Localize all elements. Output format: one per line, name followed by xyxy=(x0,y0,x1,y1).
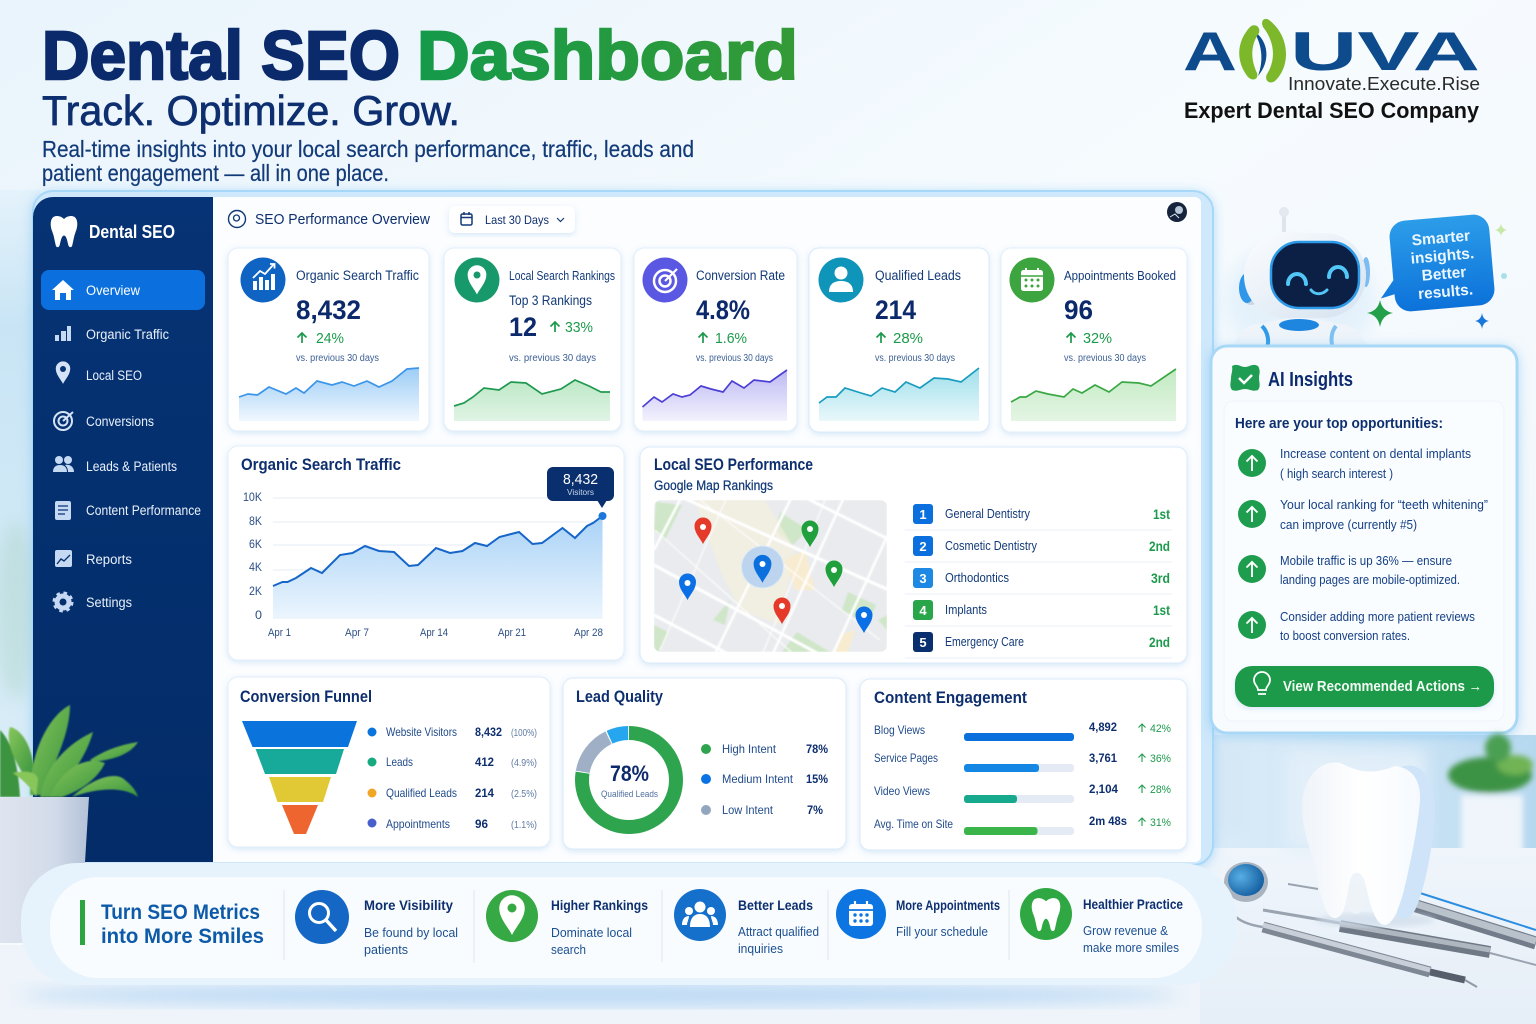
benefit: Better Leads: Attract qualified xyxy=(738,924,819,939)
KPI card: Conversion Rate: vs. previous 30 days xyxy=(696,353,773,364)
x axis labels: Apr 28 xyxy=(574,627,603,639)
sidebar brand: Dental SEO xyxy=(89,222,175,242)
speech bubble: results. xyxy=(1417,281,1474,303)
nav item: Leads & Patients: Leads & Patients xyxy=(86,459,177,474)
pin: red 1 xyxy=(694,518,712,544)
ranking: Orthodontics xyxy=(913,568,1170,588)
ranking: Implants xyxy=(913,600,1170,620)
icon xyxy=(818,258,864,302)
nav item: Leads & Patients xyxy=(53,456,177,474)
intro text xyxy=(42,136,694,186)
legend row: Qualified Leads: (2.5%) xyxy=(511,789,537,800)
legend row: High Intent: High Intent xyxy=(722,742,777,756)
bottom banner xyxy=(20,863,1237,1007)
benefit: More Visibility: patients xyxy=(364,942,408,957)
insight 3: landing pages are mobile-optimized. xyxy=(1280,572,1460,587)
legend row: Low Intent: 7% xyxy=(807,803,823,817)
sparkline xyxy=(454,380,610,421)
benefit: More Visibility: Be found by local xyxy=(364,925,458,940)
pin: blue 2 xyxy=(856,606,872,633)
sparkline xyxy=(1011,369,1176,421)
area line chart xyxy=(273,512,606,618)
icon: green check shield xyxy=(1230,365,1260,391)
intro text: patient engagement — all in one place. xyxy=(42,160,389,186)
nav item: Reports xyxy=(55,550,132,567)
intro text: Real-time insights into your local search performance, traffic, leads and xyxy=(42,136,694,162)
ranking: General Dentistry: 1st xyxy=(1153,506,1170,522)
x axis labels: Apr 1 xyxy=(268,627,291,639)
benefit: More Appointments: More Appointments xyxy=(896,897,1000,913)
y axis labels: 2K xyxy=(249,584,262,598)
KPI card: Organic Search Traffic xyxy=(228,248,429,431)
legend row: Leads: Leads xyxy=(386,755,413,769)
callout: 8,432 visitors: 8,432 xyxy=(563,471,598,488)
pin: green 2 xyxy=(826,560,842,587)
robot head xyxy=(1244,233,1366,318)
panel: Conversion Funnel xyxy=(228,677,550,847)
robot face xyxy=(1288,267,1347,294)
row: Video Views xyxy=(874,782,1171,803)
benefit: Better Leads: Better Leads xyxy=(738,897,813,913)
KPI card: Appointments Booked: 32% xyxy=(1083,330,1112,347)
icon xyxy=(240,258,286,302)
callout: 8,432 visitors: Visitors xyxy=(567,487,594,497)
legend row: Leads xyxy=(368,755,537,769)
legend row: Medium Intent: Medium Intent xyxy=(722,772,794,786)
row: Blog Views: Blog Views xyxy=(874,723,925,737)
plant left xyxy=(0,705,138,797)
legend row: Low Intent xyxy=(701,803,823,817)
y axis labels: 6K xyxy=(249,537,262,551)
panel: Content Engagement: Content Engagement xyxy=(874,689,1027,707)
y axis labels: 0 xyxy=(255,608,262,622)
KPI card: Conversion Rate xyxy=(634,248,797,431)
nav item: Overview xyxy=(41,270,205,310)
KPI card: Conversion Rate: Conversion Rate xyxy=(696,268,785,283)
benefit: Better Leads xyxy=(674,889,819,956)
nav item: Conversions: Conversions xyxy=(86,414,154,429)
back instrument xyxy=(1288,884,1536,943)
panel: Local SEO Performance: Local SEO Performance xyxy=(654,456,813,474)
pin: red 2 xyxy=(774,598,790,624)
KPI card: Local Search Rankings: vs. previous 30 days xyxy=(509,353,596,364)
KPI card: Appointments Booked: vs. previous 30 days xyxy=(1064,353,1146,364)
row: Service Pages: Service Pages xyxy=(874,751,938,765)
insight 1 xyxy=(1238,446,1471,481)
KPI card: Local Search Rankings: Top 3 Rankings xyxy=(509,293,592,308)
legend row: Appointments: Appointments xyxy=(386,817,450,831)
tooth back root xyxy=(1395,766,1435,919)
banner headline: Turn SEO Metrics xyxy=(101,901,260,924)
row: Blog Views: 4,892 xyxy=(1089,720,1117,734)
KPI card: Qualified Leads: 28% xyxy=(893,330,923,347)
date selector: Last 30 Days xyxy=(485,213,549,227)
ranking: Emergency Care: 5 xyxy=(919,635,927,650)
title: Dashboard xyxy=(417,17,798,94)
ranking: Cosmetic Dentistry: 2 xyxy=(919,539,927,554)
insight 2 xyxy=(1238,497,1488,532)
logo: ANUVA: A xyxy=(1183,20,1237,82)
KPI card: Organic Search Traffic: 8,432 xyxy=(296,295,361,325)
nav item: Settings: Settings xyxy=(86,595,132,610)
speech bubble xyxy=(1374,213,1496,314)
panel: Local SEO Performance xyxy=(640,447,1187,663)
probe xyxy=(1263,910,1536,965)
KPI card: Local Search Rankings: 33% xyxy=(565,319,593,336)
legend row: Medium Intent xyxy=(701,772,828,786)
sparkline xyxy=(642,370,787,421)
header: SEO Performance Overview: SEO Performance Overview xyxy=(255,211,430,228)
panel: Lead Quality xyxy=(563,678,846,849)
ranking: Cosmetic Dentistry xyxy=(913,536,1170,556)
button: View Recommended Actions xyxy=(1235,666,1494,707)
benefit: Better Leads: inquiries xyxy=(738,941,783,956)
benefit: Healthier Practice: Grow revenue & xyxy=(1083,923,1168,938)
panel: Local SEO Performance: Google Map Rankings xyxy=(654,478,773,493)
nav item: Organic Traffic xyxy=(55,326,169,342)
legend row: Low Intent: Low Intent xyxy=(722,803,774,817)
legend row: Qualified Leads: 214 xyxy=(475,786,494,800)
legend row: Appointments xyxy=(368,817,537,831)
legend row: Qualified Leads: Qualified Leads xyxy=(386,786,457,800)
benefit: Healthier Practice xyxy=(1020,888,1183,955)
y axis labels: 4K xyxy=(249,560,262,574)
mirror xyxy=(1224,862,1477,987)
legend row: Medium Intent: 15% xyxy=(806,772,828,786)
ranking: Emergency Care: 2nd xyxy=(1149,634,1170,650)
KPI card: Appointments Booked: Appointments Booked xyxy=(1064,268,1176,283)
ranking: Emergency Care: Emergency Care xyxy=(945,635,1024,649)
speech bubble: insights. xyxy=(1410,245,1475,268)
title xyxy=(42,17,798,94)
legend row: Website Visitors: 8,432 xyxy=(475,725,502,739)
insight 2: can improve (currently #5) xyxy=(1280,517,1417,532)
benefit: More Appointments xyxy=(836,889,1000,939)
benefit: More Visibility: More Visibility xyxy=(364,897,453,913)
sidebar xyxy=(33,197,213,862)
row: Avg. Time on Site: 31% xyxy=(1150,817,1171,829)
nav item: Local SEO xyxy=(56,361,142,384)
legend row: Website Visitors xyxy=(368,725,537,739)
benefit: Higher Rankings: Higher Rankings xyxy=(551,897,648,913)
x axis labels: Apr 14 xyxy=(420,627,448,639)
KPI card: Local Search Rankings: 12 xyxy=(509,312,537,342)
row: Video Views: 2,104 xyxy=(1089,782,1118,796)
nav item: Settings xyxy=(54,593,132,611)
panel: Content Engagement xyxy=(860,679,1187,850)
icon xyxy=(454,258,500,302)
KPI card: Conversion Rate: 1.6% xyxy=(715,330,747,347)
panel: AI Insights: AI Insights xyxy=(1268,369,1353,391)
row: Service Pages xyxy=(874,751,1171,772)
ranking: Implants: Implants xyxy=(945,603,987,617)
KPI card: Qualified Leads: Qualified Leads xyxy=(875,268,961,283)
insight 1: Increase content on dental implants xyxy=(1280,446,1471,461)
donut chart: Qualified Leads xyxy=(601,789,658,800)
KPI card: Conversion Rate: 4.8% xyxy=(696,295,750,325)
panel: Organic Search Traffic chart: Organic Search Traffic xyxy=(241,455,401,474)
KPI card: Local Search Rankings: Local Search Rankings xyxy=(509,269,615,283)
funnel chart xyxy=(242,721,357,834)
legend row: High Intent: 78% xyxy=(806,742,828,756)
title: Dental SEO xyxy=(42,17,400,94)
tagline: Track. Optimize. Grow. xyxy=(42,87,460,134)
ranking: Emergency Care xyxy=(913,632,1170,652)
button: View Recommended Actions: View Recommended Actions → xyxy=(1283,678,1482,695)
benefit: Higher Rankings xyxy=(486,890,648,957)
row: Service Pages: 3,761 xyxy=(1089,751,1117,765)
ranking: Cosmetic Dentistry: 2nd xyxy=(1149,538,1170,554)
ranking: Orthodontics: Orthodontics xyxy=(945,571,1009,585)
insight 3: Mobile traffic is up 36% — ensure xyxy=(1280,553,1452,568)
icon xyxy=(1010,258,1054,302)
panel: Organic Search Traffic chart xyxy=(228,446,624,660)
y axis labels xyxy=(243,490,262,622)
nav item: Overview: Overview xyxy=(86,283,140,298)
tooth model xyxy=(1302,762,1435,927)
pin: center xyxy=(742,546,784,588)
benefit: More Appointments: Fill your schedule xyxy=(896,924,988,939)
y axis labels: 10K xyxy=(243,490,262,504)
tooth front xyxy=(1302,762,1420,925)
plant pot xyxy=(0,797,89,943)
KPI card: Organic Search Traffic: 24% xyxy=(316,330,344,347)
ranking: Orthodontics: 3 xyxy=(919,571,927,586)
ranking: General Dentistry: 1 xyxy=(919,507,927,522)
legend row: High Intent xyxy=(701,742,828,756)
logo: ANUVA: Expert Dental SEO Company xyxy=(1184,98,1480,123)
ranking: General Dentistry: General Dentistry xyxy=(945,507,1031,521)
KPI card: Qualified Leads: 214 xyxy=(875,295,916,325)
insight 4: Consider adding more patient reviews xyxy=(1280,609,1475,624)
insight 2: Your local ranking for “teeth whitening” xyxy=(1280,497,1488,512)
sparkles xyxy=(1367,224,1507,329)
logo: ANUVA: UVA xyxy=(1290,20,1480,82)
logo: ANUVA xyxy=(1183,19,1480,123)
benefit: More Visibility xyxy=(295,890,458,957)
nav item: Local SEO: Local SEO xyxy=(86,368,142,383)
plant right, blurred xyxy=(1448,734,1533,855)
nav item: Conversions xyxy=(54,412,154,430)
KPI card: Organic Search Traffic: Organic Search Traffic xyxy=(296,268,419,283)
x axis labels xyxy=(268,627,603,639)
legend row: Leads: (4.9%) xyxy=(511,758,537,769)
panel: AI Insights: Here are your top opportunities: xyxy=(1235,415,1443,432)
benefit: Healthier Practice: make more smiles xyxy=(1083,940,1179,955)
benefit: Higher Rankings: Dominate local xyxy=(551,925,632,940)
donut chart: 78% xyxy=(610,761,649,786)
dashboard frame xyxy=(33,191,1213,865)
sparkline xyxy=(239,368,419,421)
legend row: Leads: 412 xyxy=(475,755,494,769)
map xyxy=(654,500,887,652)
nav item: Organic Traffic: Organic Traffic xyxy=(86,327,169,342)
banner headline: into More Smiles xyxy=(101,925,264,948)
ranking: Orthodontics: 3rd xyxy=(1151,570,1170,586)
icon: tooth logo xyxy=(51,216,77,247)
ranking: Cosmetic Dentistry: Cosmetic Dentistry xyxy=(945,539,1038,553)
insight 3 xyxy=(1238,553,1460,587)
legend row: Appointments: 96 xyxy=(475,817,488,831)
tooth middle root xyxy=(1345,885,1367,914)
KPI card: Local Search Rankings xyxy=(444,248,621,431)
KPI card: Appointments Booked: 96 xyxy=(1064,295,1093,325)
donut chart xyxy=(582,733,676,827)
robot mascot xyxy=(1225,207,1375,360)
nav item: Content Performance: Content Performance xyxy=(86,503,201,518)
banner headline xyxy=(80,900,264,948)
pin: blue 1 xyxy=(679,574,696,600)
row: Blog Views: 42% xyxy=(1150,723,1171,735)
legend row: Website Visitors: (100%) xyxy=(511,728,537,739)
avatar xyxy=(1167,202,1187,222)
benefit: Higher Rankings: search xyxy=(551,942,586,957)
legend row: Appointments: (1.1%) xyxy=(511,820,537,831)
legend row: Website Visitors: Website Visitors xyxy=(386,725,457,739)
sparkline xyxy=(819,368,979,421)
row: Avg. Time on Site: 2m 48s xyxy=(1089,814,1127,828)
KPI card: Appointments Booked xyxy=(1001,248,1187,432)
callout: 8,432 visitors xyxy=(547,467,614,508)
KPI card: Qualified Leads: vs. previous 30 days xyxy=(875,353,955,364)
y axis labels: 8K xyxy=(249,514,262,528)
insight 4 xyxy=(1238,609,1475,643)
panel: Lead Quality: Lead Quality xyxy=(576,688,664,706)
insight 1: ( high search interest ) xyxy=(1280,466,1393,481)
robot body xyxy=(1233,318,1367,350)
KPI card: Organic Search Traffic: vs. previous 30 days xyxy=(296,353,379,364)
dental instruments xyxy=(1224,862,1536,987)
ranking: Implants: 1st xyxy=(1153,602,1170,618)
row: Avg. Time on Site xyxy=(874,814,1171,835)
KPI card: Qualified Leads xyxy=(809,248,989,432)
row: Video Views: Video Views xyxy=(874,784,930,798)
x axis labels: Apr 21 xyxy=(498,627,526,639)
panel: Conversion Funnel: Conversion Funnel xyxy=(240,688,372,706)
pin: green 1 xyxy=(802,520,818,547)
date selector xyxy=(449,206,575,233)
logo: ANUVA: Innovate.Execute.Rise xyxy=(1288,74,1480,94)
row: Avg. Time on Site: Avg. Time on Site xyxy=(874,817,953,831)
speech bubble: Smarter xyxy=(1411,227,1471,250)
nav item: Reports: Reports xyxy=(86,552,132,567)
row: Video Views: 28% xyxy=(1150,784,1171,796)
insight 4: to boost conversion rates. xyxy=(1280,628,1410,643)
speech bubble: Better xyxy=(1421,264,1467,285)
ranking: General Dentistry xyxy=(913,504,1170,524)
row: Service Pages: 36% xyxy=(1150,753,1171,765)
legend row: Qualified Leads xyxy=(368,786,537,800)
x axis labels: Apr 7 xyxy=(345,627,369,639)
nav item: Content Performance xyxy=(55,501,201,520)
panel: AI Insights xyxy=(1211,346,1517,733)
icon xyxy=(642,258,688,302)
ranking: Implants: 4 xyxy=(919,603,927,618)
row: Blog Views xyxy=(874,720,1171,741)
benefit: Healthier Practice: Healthier Practice xyxy=(1083,896,1183,912)
